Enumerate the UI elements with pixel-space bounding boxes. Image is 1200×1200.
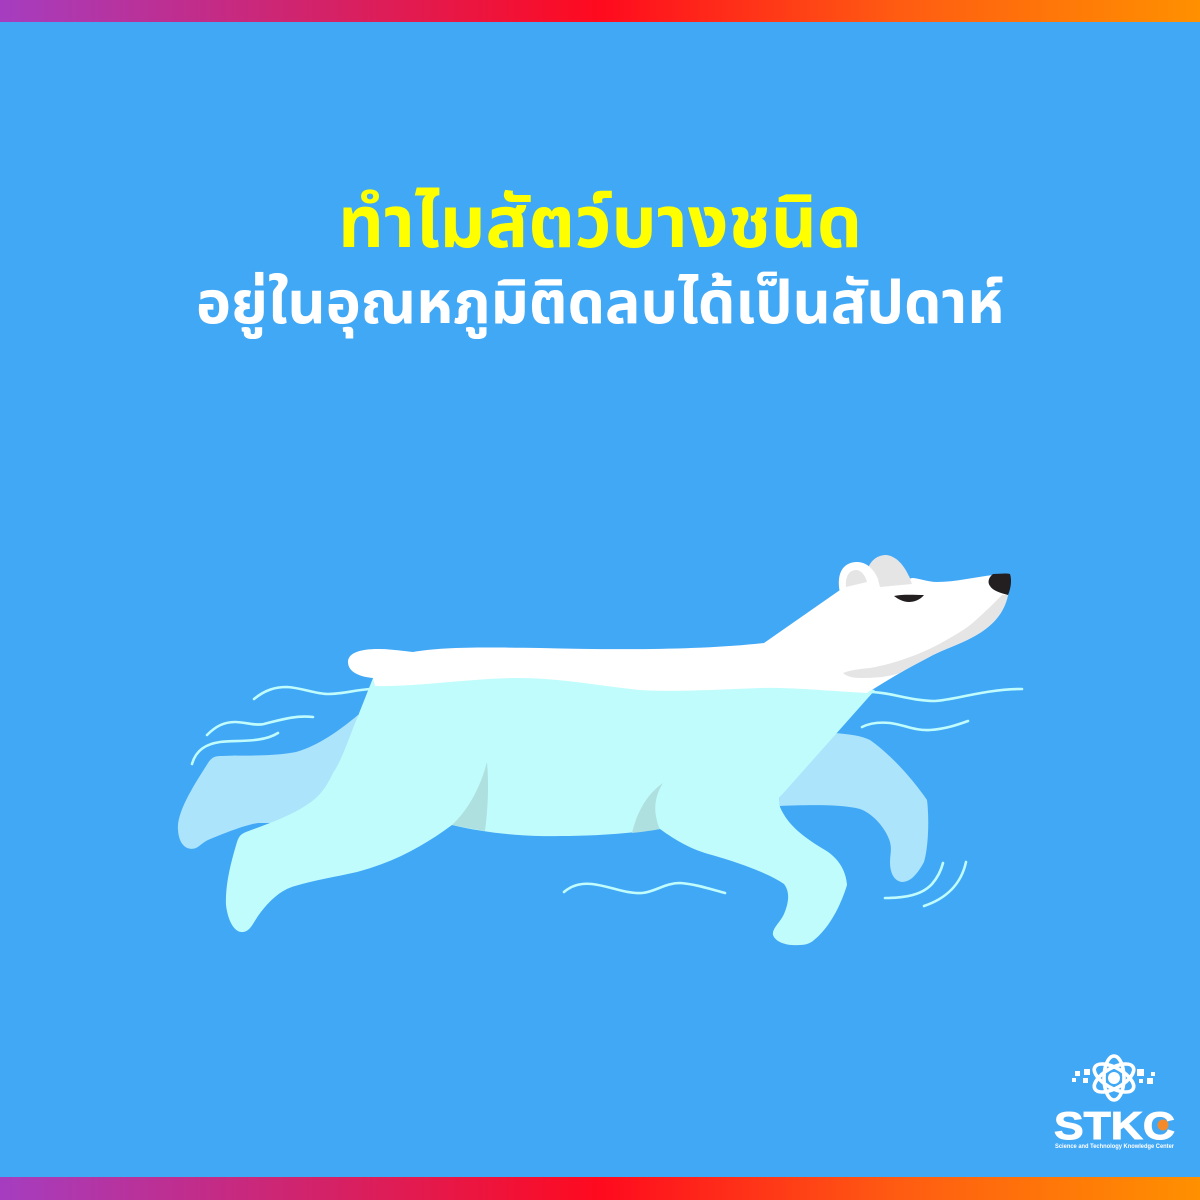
hind leg shadow [452,762,488,831]
title line 1: ทำไมสัตว์บางชนิด [338,183,862,263]
far ear [868,555,912,590]
logo pixel dots [1072,1069,1155,1084]
top gradient bar [0,0,1200,22]
ripple left 1 [254,687,370,699]
logo tagline: Science and Technology Knowledge Center [1055,1144,1175,1150]
submerged body [226,670,875,945]
title line 2: อยู่ในอุณหภูมิติดลบได้เป็นสัปดาห์ [196,269,1004,339]
logo wordmark: STKC [1054,1105,1175,1148]
title [196,183,1004,339]
jaw shading [843,595,1008,678]
ripple right 2 [862,721,968,730]
logo atom icon [1090,1056,1138,1100]
white back and head above water [348,575,1008,693]
near ear inner [846,570,867,587]
nose [989,574,1011,595]
eye [894,595,924,602]
ripple left 2 [207,717,313,735]
ripple left 3 [192,733,278,764]
near ear [839,562,881,593]
logo orange dot [1158,1120,1168,1130]
logo: STKC [1054,1056,1175,1150]
far hind leg [178,715,420,849]
bottom gradient bar [0,1177,1200,1200]
ripple paw 1 [885,863,943,898]
illustration: swimming polar bear [178,555,1011,945]
ripple right 1 [870,689,1022,701]
ripple bottom [564,883,725,893]
far ear base [878,576,912,587]
front leg shadow [632,783,663,833]
water ripples [192,687,1022,906]
ripple paw 2 [924,862,966,906]
far front leg [779,733,928,882]
